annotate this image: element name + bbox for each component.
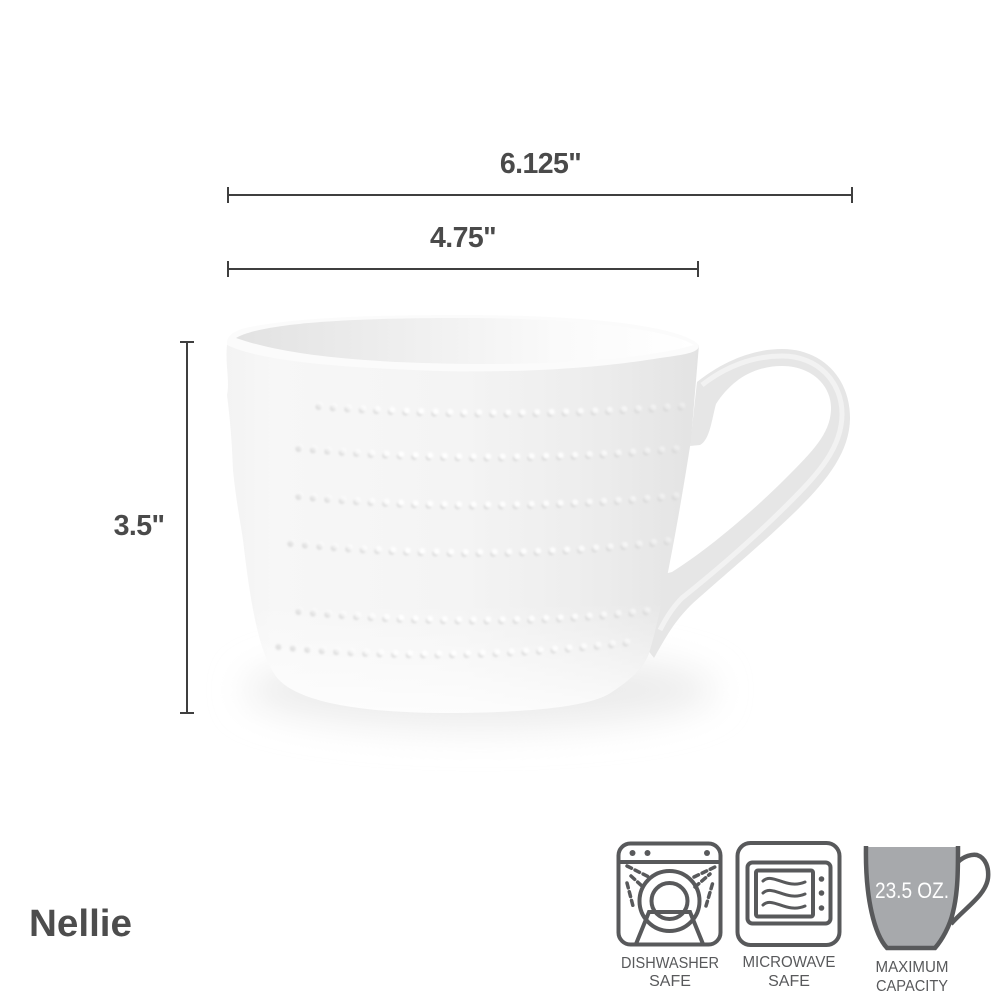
label: dishwasher safe: DISHWASHER [621, 955, 719, 972]
dimension: overall width 6.125 inches [228, 148, 852, 203]
dimension: height 3.5 inches [114, 342, 194, 713]
icon: dishwasher safe [618, 844, 720, 944]
label: dishwasher safe: SAFE [649, 973, 691, 990]
embossed dot rows [278, 405, 690, 655]
label: microwave safe: MICROWAVE [742, 954, 836, 971]
mug body [227, 345, 699, 713]
icon: microwave safe [738, 843, 840, 945]
mug photograph [227, 315, 850, 728]
dimension: overall width 6.125 inches: 6.125" [500, 148, 581, 180]
icon: maximum capacity mug [866, 846, 988, 948]
mug interior [236, 318, 694, 364]
capacity mug fill [866, 847, 957, 948]
brand name: Nellie [29, 903, 132, 945]
label: microwave safe: SAFE [768, 973, 810, 990]
capacity value: 23.5 OZ. [875, 878, 949, 903]
capacity mug outline and handle [866, 846, 988, 948]
dimension: rim diameter 4.75 inches [228, 222, 698, 277]
mug rim [227, 315, 699, 371]
label: maximum capacity: MAXIMUM [876, 959, 948, 976]
mug handle [640, 349, 850, 658]
label: maximum capacity: CAPACITY [876, 978, 948, 995]
dimension: rim diameter 4.75 inches: 4.75" [430, 222, 496, 254]
dimension: height 3.5 inches: 3.5" [114, 510, 164, 542]
mug shadow [245, 652, 715, 728]
